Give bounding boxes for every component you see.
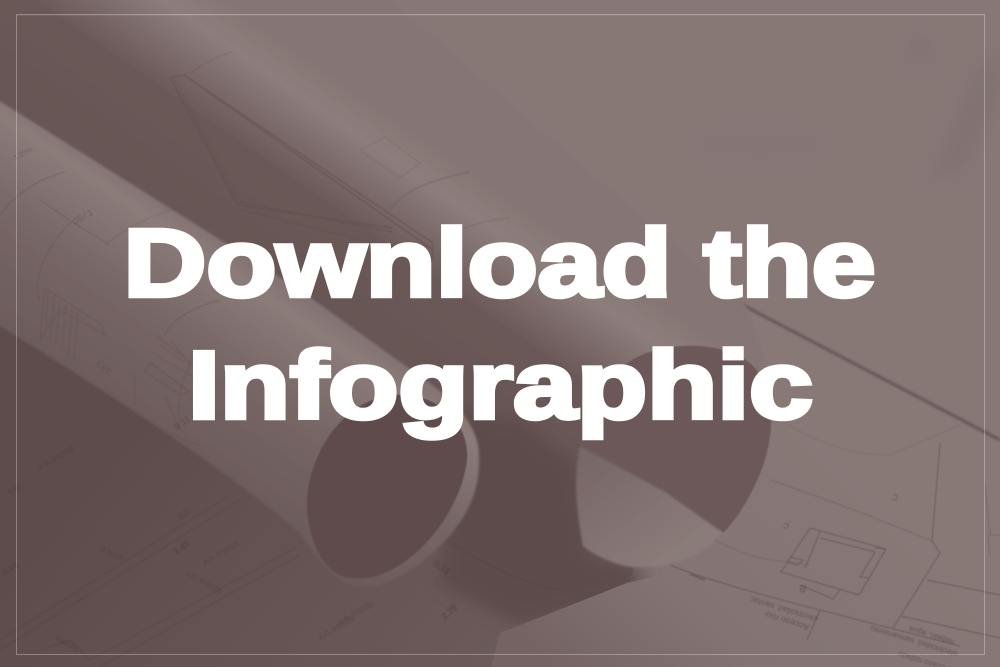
- title line 1: Download the: [124, 210, 876, 317]
- paper fold shadow: [733, 300, 1000, 440]
- lower-left plan annotations: 0.11: [432, 558, 452, 576]
- lower-right blueprint sheet: [490, 305, 1000, 667]
- drawing on front roll: [0, 172, 220, 446]
- lower-left plan annotations: A.B. 0*50/25: [202, 541, 240, 567]
- lower-right plan annotations: B: [798, 582, 808, 594]
- lower-right plan annotations: C: [782, 521, 790, 531]
- lower-left plan annotations: 1.45: [171, 538, 192, 557]
- lower-right site plan: [670, 420, 1000, 646]
- lower-left plan annotations: A.C. 0*50/25: [318, 616, 355, 642]
- front roll notes: 1.20m: [13, 146, 33, 162]
- back roll inner wall: [576, 446, 723, 568]
- shadow between rolls: [440, 410, 650, 625]
- drawing on back roll: [170, 52, 510, 258]
- lower-right plan annotations: rodado, agua: [907, 624, 956, 647]
- smudges on top paper: [690, 40, 1000, 180]
- lower-left plan annotations: 3.5: [175, 506, 191, 522]
- lower-right plan annotations: electricidad, sanitar.: [748, 594, 819, 624]
- front roll notes: 05 ⁄ 1: [71, 207, 95, 227]
- lower-left plan annotations: A.B. 0*50/25: [338, 601, 375, 627]
- lower-left plan annotations: 0.11: [7, 484, 22, 497]
- lower-left plan drawing: [0, 495, 560, 667]
- lower-left plan annotations: 4.44: [0, 560, 20, 578]
- front roll: [0, 95, 479, 587]
- title line 2: Infographic: [188, 332, 813, 439]
- lower-right plan annotations: Acceso rou-: [762, 609, 811, 633]
- lower-right plan annotations: C: [891, 492, 899, 502]
- front roll notes: EEE: [94, 359, 114, 378]
- lower-right plan annotations: [748, 492, 959, 667]
- lower-left plan annotations: [0, 414, 459, 654]
- front roll interior opening: [307, 395, 467, 579]
- lower-left plan annotations: A.C. 0*50/25: [184, 571, 222, 595]
- lower-left plan annotations: 2.75: [440, 602, 459, 621]
- lower-left plan annotations: Passeio: [54, 636, 79, 654]
- lower-right plan annotations: electricidad, saneamiento: [869, 623, 959, 659]
- back roll interior opening: [580, 346, 771, 533]
- front roll notes: [13, 146, 114, 378]
- lower-left blueprint sheet: [0, 300, 640, 667]
- lower-left plan annotations: 0.11: [172, 414, 192, 432]
- lower-left plan annotations: D.50/25: [99, 546, 124, 563]
- back roll: [0, 0, 771, 625]
- lower-left plan annotations: A.B. 0*50/25: [38, 446, 75, 472]
